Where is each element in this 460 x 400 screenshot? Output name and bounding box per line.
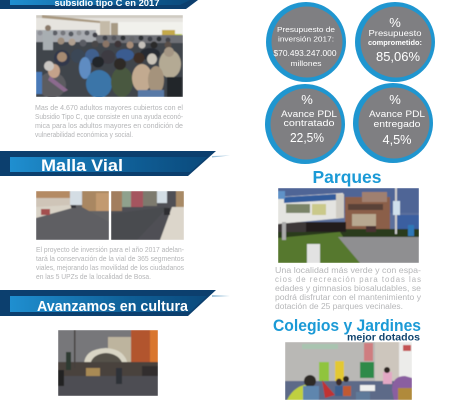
- text: subsidio tipo C description: [35, 103, 183, 139]
- photo: street before: [36, 191, 109, 240]
- stat circle: presupuesto de inversión: $70.493.247.000: [274, 48, 337, 58]
- photo: street after: [111, 191, 184, 240]
- text: Parques description: podrá disfrutar con el mantenimiento y: [275, 293, 421, 302]
- stat circle: avance PDL contratado: Avance PDL: [281, 109, 337, 119]
- stat circle: avance PDL contratado: 22,5%: [290, 131, 324, 145]
- text: Parques description: edades y gimnasios biosaludables, se: [275, 284, 421, 293]
- stat circle: presupuesto comprometido: [355, 2, 435, 82]
- text: Parques description: dotación de 25 parques vecinales.: [275, 302, 403, 311]
- stat circle: avance PDL entregado: entregado: [374, 119, 420, 129]
- banner: Avanzamos en cultura: Avanzamos en cultura: [37, 299, 189, 315]
- heading: Colegios y Jardines: mejor dotados: [347, 332, 420, 344]
- photo: parque: [278, 188, 419, 263]
- stat circle: presupuesto de inversión: inversión 2017:: [278, 34, 334, 44]
- text: Parques description: [275, 266, 421, 311]
- stat circle: presupuesto comprometido: Presupuesto: [368, 28, 422, 38]
- stat circle: presupuesto de inversión: millones: [290, 59, 322, 68]
- heading: Colegios y Jardines: Colegios y Jardines: [273, 316, 421, 335]
- text: subsidio tipo C description: Subsidio Tipo C, que consiste en una ayuda econó-: [35, 112, 183, 121]
- stat circle: presupuesto comprometido: %: [389, 15, 401, 30]
- stat circle: avance PDL entregado: Avance PDL: [369, 109, 425, 119]
- banner: Avanzamos en cultura: [0, 290, 230, 316]
- text: subsidio tipo C description: vulnerabilidad económica y social.: [35, 130, 133, 139]
- banner: subsidio tipo C: [0, 0, 198, 9]
- photo: adultos mayores audience: [36, 15, 183, 98]
- heading: Colegios y Jardines: [273, 316, 421, 344]
- photo: jardín infantil: [285, 342, 412, 400]
- text: Malla Vial description: tará la conservación de la vial de 365 segmentos: [36, 254, 184, 263]
- stat circle: presupuesto de inversión: Presupuesto de: [277, 25, 335, 34]
- stat circle: avance PDL contratado: [265, 84, 345, 164]
- heading: Parques: Parques: [312, 167, 382, 187]
- stat circle: presupuesto de inversión: [266, 2, 346, 82]
- stat circle: presupuesto comprometido: comprometido:: [368, 38, 422, 47]
- banner: Malla Vial: [0, 151, 230, 176]
- banner: Malla Vial: Malla Vial: [41, 156, 123, 175]
- text: Parques description: Una localidad más verde y con espa-: [275, 266, 421, 275]
- text: subsidio tipo C description: mica para los adultos mayores en condición de: [35, 121, 183, 130]
- text: Malla Vial description: viales, mejorando las movilidad de los ciudadanos: [36, 263, 184, 272]
- text: Malla Vial description: [36, 245, 184, 281]
- stat circle: avance PDL contratado: %: [301, 92, 313, 107]
- stat circle: avance PDL contratado: contratado: [284, 118, 334, 128]
- text: Malla Vial description: El proyecto de inversión para el año 2017 adelan-: [36, 245, 184, 254]
- stat circle: presupuesto comprometido: 85,06%: [376, 50, 420, 64]
- text: Malla Vial description: en las 5 UPZs de la localidad de Bosa.: [36, 272, 151, 281]
- text: Parques description: cios de recreación para todas las: [275, 275, 421, 284]
- stat circle: avance PDL entregado: 4,5%: [382, 133, 412, 147]
- photo: cultural event: [58, 330, 158, 396]
- text: subsidio tipo C description: Mas de 4.670 adultos mayores cubiertos con el: [35, 103, 183, 112]
- stat circle: avance PDL entregado: %: [389, 92, 401, 107]
- stat circle: avance PDL entregado: [353, 83, 433, 163]
